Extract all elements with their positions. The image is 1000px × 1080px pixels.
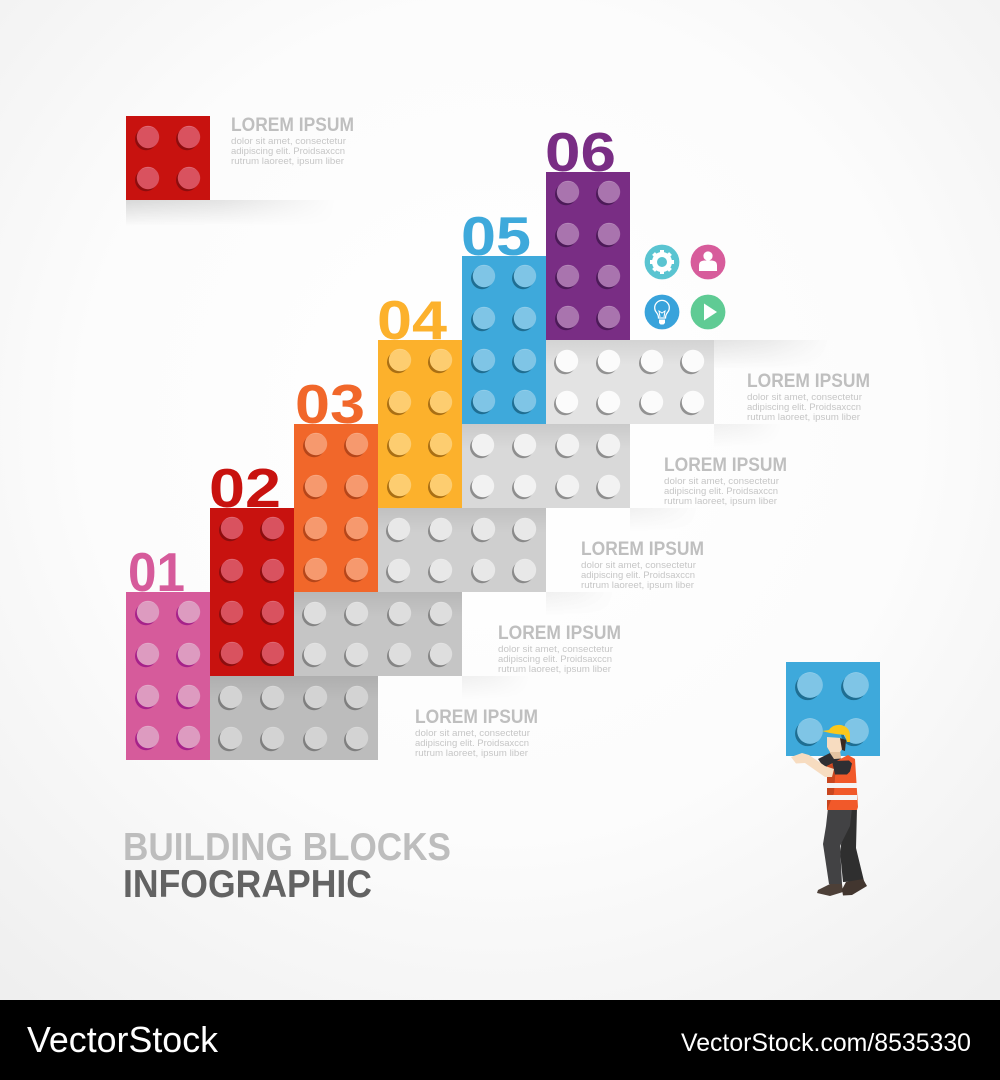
neck <box>830 750 842 764</box>
legend text: dolor sit amet, consectetur <box>231 136 346 147</box>
footer brand: VectorStock <box>27 1019 219 1060</box>
text block: step 05: rutrum laoreet, ipsum liber <box>747 412 860 423</box>
number 03: 03 <box>295 373 365 435</box>
title: BUILDING BLOCKS <box>123 826 451 869</box>
shoes <box>817 884 843 896</box>
text block: step 04: LOREM IPSUM <box>664 455 787 476</box>
text block: step 02: LOREM IPSUM <box>498 623 621 644</box>
text block: step 03 <box>581 539 704 591</box>
title: INFOGRAPHIC <box>123 863 372 906</box>
icon: play <box>691 295 725 329</box>
red legend block <box>126 116 210 200</box>
arm <box>791 753 834 777</box>
footer bar <box>0 1000 1000 1080</box>
legend text: adipiscing elit. Proidsaxccn <box>231 146 345 157</box>
icon: gear <box>645 245 679 279</box>
icon: person <box>691 245 725 279</box>
text block: step 05: dolor sit amet, consectetur <box>747 392 862 403</box>
panel: grey block 1 <box>210 676 378 760</box>
text block: step 03: LOREM IPSUM <box>581 539 704 560</box>
text block: step 01: LOREM IPSUM <box>415 707 538 728</box>
step shadows <box>462 340 834 700</box>
text block: step 01 <box>415 707 538 759</box>
text block: step 04: adipiscing elit. Proidsaxccn <box>664 486 778 497</box>
panel: step 02 red column <box>210 508 294 676</box>
number 04: 04 <box>377 289 447 351</box>
text block: step 02: rutrum laoreet, ipsum liber <box>498 664 611 675</box>
shirt <box>818 753 852 772</box>
legend text <box>231 115 354 167</box>
text block: step 01: dolor sit amet, consectetur <box>415 728 530 739</box>
number 02: 02 <box>209 457 281 519</box>
helmet <box>822 725 850 742</box>
panel: carried blue block <box>786 662 880 756</box>
number 01: 01 <box>128 541 185 603</box>
text block: step 01: rutrum laoreet, ipsum liber <box>415 748 528 759</box>
vest <box>827 755 858 810</box>
text block: step 05: LOREM IPSUM <box>747 371 870 392</box>
number 06: 06 <box>545 121 616 183</box>
text block: step 03: rutrum laoreet, ipsum liber <box>581 580 694 591</box>
number 05: 05 <box>461 205 531 267</box>
panel: top legend block <box>126 115 354 226</box>
panel: grey block 4 <box>462 424 630 508</box>
text block: step 04: dolor sit amet, consectetur <box>664 476 779 487</box>
sleeve <box>832 760 852 774</box>
text block: step 03: adipiscing elit. Proidsaxccn <box>581 570 695 581</box>
illustration: construction worker <box>791 725 867 896</box>
legend text: LOREM IPSUM <box>231 115 354 136</box>
text block: step 04 <box>664 455 787 507</box>
text block: step 01: adipiscing elit. Proidsaxccn <box>415 738 529 749</box>
footer url: VectorStock.com/8535330 <box>681 1029 971 1057</box>
panel: step 05 blue column <box>462 256 546 424</box>
text block: step 05: adipiscing elit. Proidsaxccn <box>747 402 861 413</box>
text block: step 02: dolor sit amet, consectetur <box>498 644 613 655</box>
panel: grey block 3 <box>378 508 546 592</box>
panel: step 01 pink column <box>126 592 210 760</box>
block shadow <box>126 200 296 220</box>
panel: step 04 yellow column <box>378 340 462 508</box>
text block: step 02: adipiscing elit. Proidsaxccn <box>498 654 612 665</box>
panel: grey block 2 <box>294 592 462 676</box>
title <box>123 826 451 906</box>
text block: step 02 <box>498 623 621 675</box>
text block: step 05 <box>747 371 870 423</box>
face <box>827 737 844 752</box>
legend text: rutrum laoreet, ipsum liber <box>231 156 344 167</box>
legs <box>840 808 864 882</box>
text block: step 04: rutrum laoreet, ipsum liber <box>664 496 777 507</box>
panel: step 06 purple column <box>546 172 630 340</box>
panel: grey block 5 <box>546 340 714 424</box>
text block: step 03: dolor sit amet, consectetur <box>581 560 696 571</box>
icon: light bulb <box>645 295 679 329</box>
panel: step 03 orange column <box>294 424 378 592</box>
